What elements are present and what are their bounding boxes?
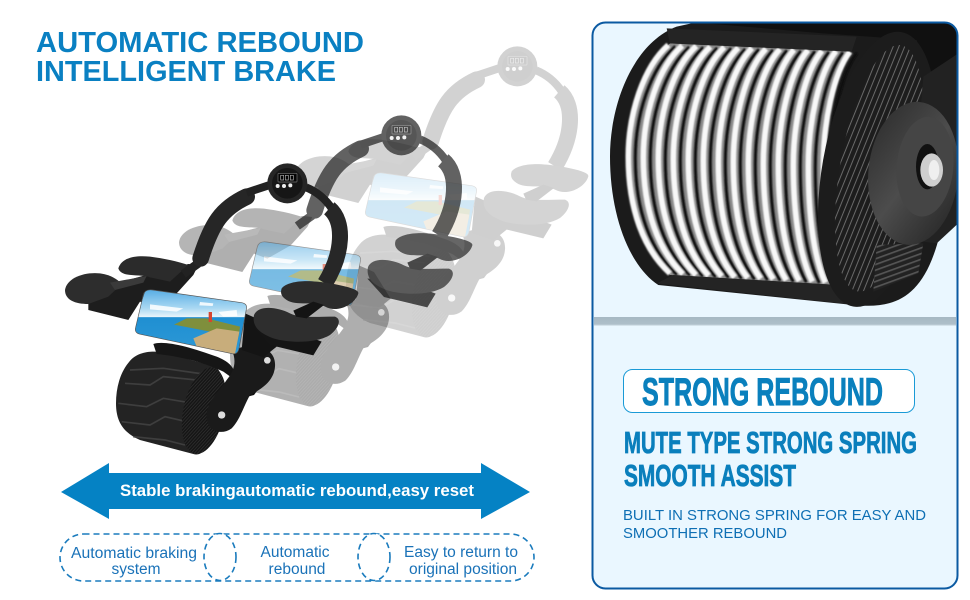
dashed feature list: Automatic braking (71, 545, 197, 562)
panel: strong rebound (592, 20, 964, 589)
panel border (592, 22, 958, 588)
spring close-up illustration (610, 20, 964, 316)
title (36, 27, 364, 88)
dashed feature list: Easy to return to (404, 544, 518, 561)
product illustration: main ab roller (65, 163, 358, 458)
description text: SMOOTHER REBOUND (623, 525, 787, 542)
product illustration: faded middle position of ab roller (179, 115, 472, 410)
subheading: SMOOTH ASSIST (624, 458, 796, 493)
divider band (594, 317, 956, 326)
double-headed arrow with caption (61, 463, 530, 519)
description text: BUILT IN STRONG SPRING FOR EASY AND (623, 507, 926, 524)
title: AUTOMATIC REBOUND (36, 27, 364, 59)
product illustration: faded far position of ab roller (295, 46, 588, 341)
dashed feature list (60, 534, 534, 581)
title: INTELLIGENT BRAKE (36, 56, 336, 88)
description text (623, 507, 926, 542)
dashed feature list: system (111, 561, 161, 578)
dashed feature list: original position (409, 561, 517, 578)
dashed feature list: rebound (269, 561, 325, 578)
subheading (624, 425, 917, 493)
double-headed arrow with caption: Stable brakingautomatic rebound,easy reset (120, 482, 475, 500)
dashed feature list: Automatic (261, 544, 330, 561)
